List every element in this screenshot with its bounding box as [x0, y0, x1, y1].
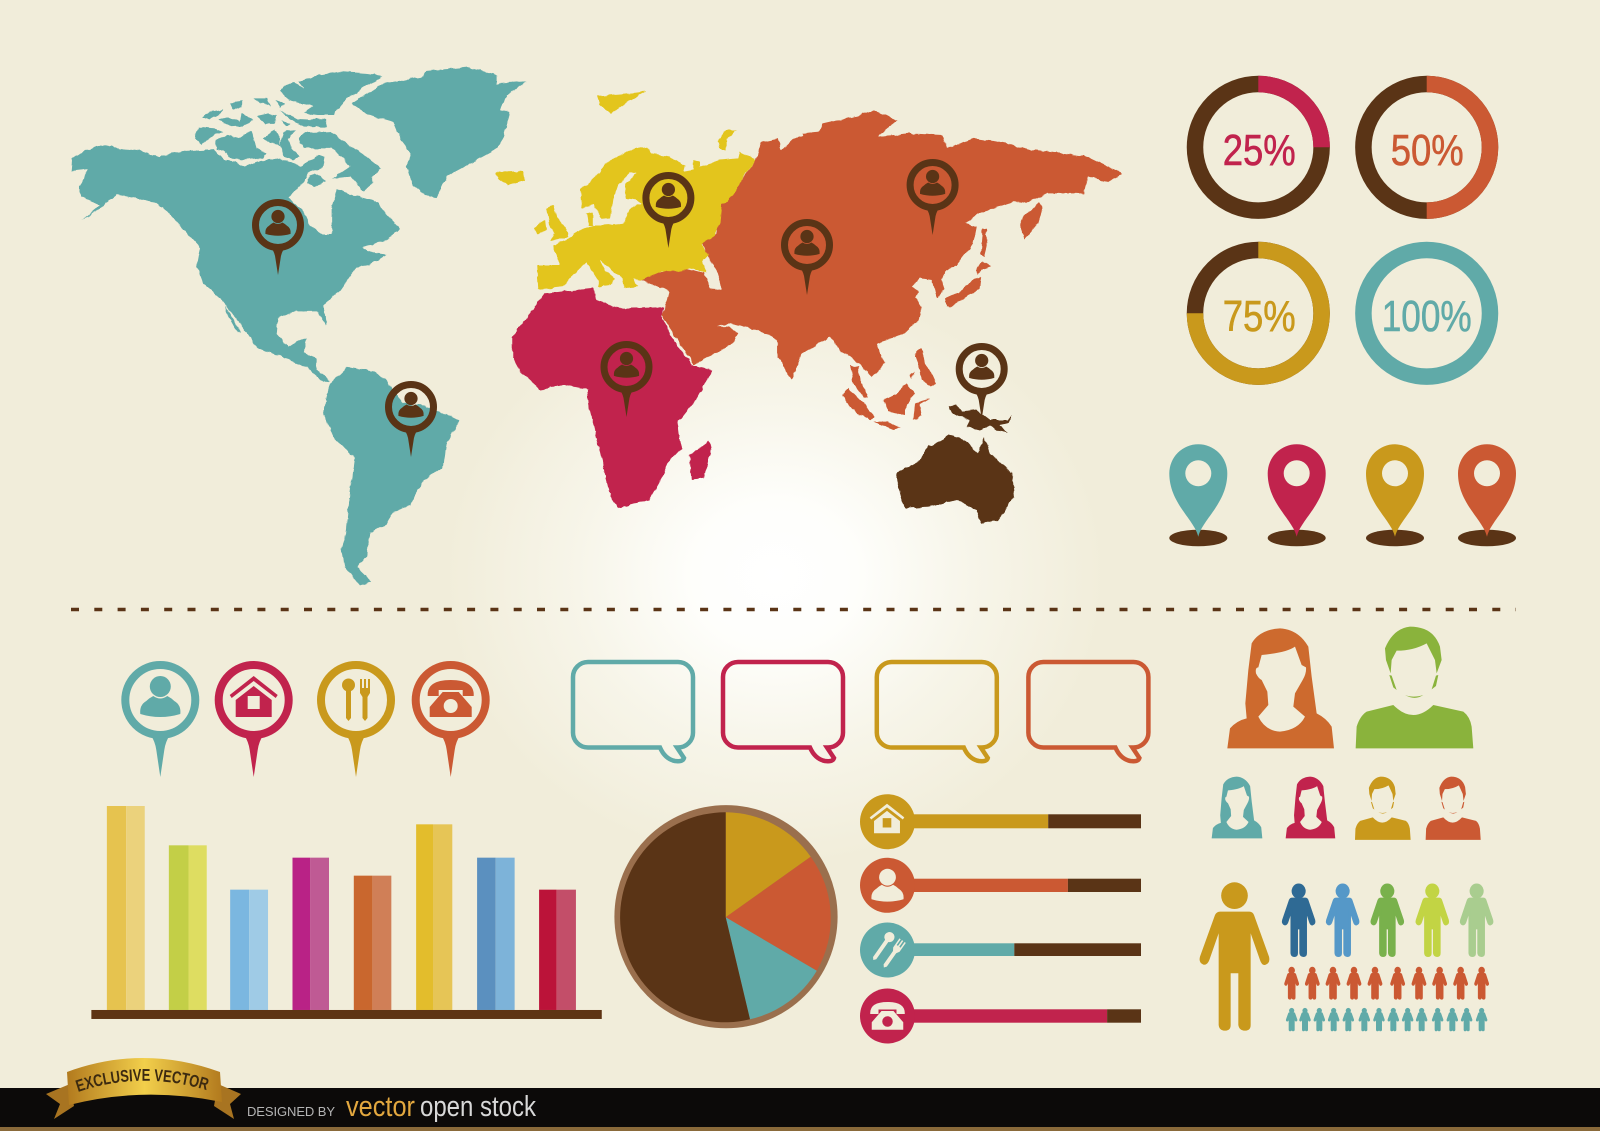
- bubble: orange: [1028, 662, 1148, 761]
- portrait: small woman teal: [1212, 777, 1262, 838]
- icon pin: restaurant: [321, 665, 391, 777]
- logo: vector: vector: [346, 1091, 415, 1123]
- panel: people portraits: [1212, 627, 1481, 840]
- marker: crimson: [1268, 444, 1326, 546]
- ring: 100%: [1363, 250, 1490, 377]
- icon pin: person: [125, 665, 195, 777]
- map pin: Siberia: [910, 162, 955, 235]
- map pin: South America: [388, 384, 434, 457]
- portrait: large man: [1356, 627, 1473, 748]
- figures: small orange row: [1285, 968, 1488, 999]
- panel: speech bubbles: [573, 662, 1148, 761]
- map landmasses: [72, 67, 1123, 585]
- ribbon badge: [46, 1058, 241, 1119]
- credit: designed by: DESIGNED BY: [247, 1104, 335, 1119]
- ring: 50%: [1363, 84, 1490, 211]
- panel: location markers: [1169, 444, 1516, 546]
- ring: 75%: [1195, 250, 1322, 377]
- ring: 75%: 75%: [1223, 292, 1296, 341]
- bubble: gold: [877, 662, 997, 761]
- bubble: teal: [573, 662, 693, 761]
- bubble: crimson: [723, 662, 843, 761]
- region: Africa: [512, 288, 712, 508]
- figures: medium row: [1283, 885, 1492, 956]
- map pin: Central Asia: [784, 222, 830, 295]
- progress bar: person: [860, 858, 1141, 913]
- region: Oceania: [896, 405, 1014, 523]
- map pin: Oceania: [959, 346, 1004, 419]
- progress bar: restaurant: [860, 922, 1141, 978]
- portrait: small man gold: [1355, 777, 1411, 840]
- panel: progress bars: [860, 794, 1141, 1044]
- marker: teal: [1169, 444, 1227, 546]
- ring: 25%: [1195, 84, 1322, 211]
- portrait: small woman crimson: [1286, 777, 1335, 838]
- bar chart: [91, 806, 602, 1019]
- icon pin: phone: [416, 665, 486, 777]
- pie chart: [614, 805, 838, 1028]
- ring: 100%: 100%: [1382, 292, 1472, 341]
- footer band: [0, 1058, 1600, 1131]
- region: Europe: [495, 92, 756, 289]
- panel: world map: [72, 67, 1123, 585]
- ring: 50%: 50%: [1391, 126, 1464, 175]
- progress bar: phone: [860, 988, 1141, 1044]
- icon pin: home: [219, 665, 289, 777]
- ribbon badge: EXCLUSIVE VECTOR: [75, 1069, 208, 1092]
- panel: percentage rings: [1195, 84, 1490, 377]
- map pin: Europe: [646, 176, 691, 248]
- ring: 25%: 25%: [1223, 126, 1296, 175]
- portrait: small man orange: [1426, 777, 1481, 840]
- map pin: North America: [256, 202, 300, 275]
- panel: icon pins: [125, 665, 486, 777]
- figure: large gold: [1200, 882, 1269, 1031]
- marker: gold: [1366, 444, 1424, 546]
- map pin: Africa: [604, 344, 649, 417]
- panel: human figures: [1200, 882, 1492, 1031]
- progress bar: home: [860, 794, 1141, 849]
- portrait: large woman: [1227, 628, 1334, 748]
- marker: orange: [1458, 444, 1516, 546]
- region: Asia: [641, 110, 1123, 430]
- logo: open stock: open stock: [420, 1091, 536, 1123]
- figures: tiny teal row: [1287, 1009, 1487, 1031]
- region: Americas and Greenland: [72, 67, 527, 585]
